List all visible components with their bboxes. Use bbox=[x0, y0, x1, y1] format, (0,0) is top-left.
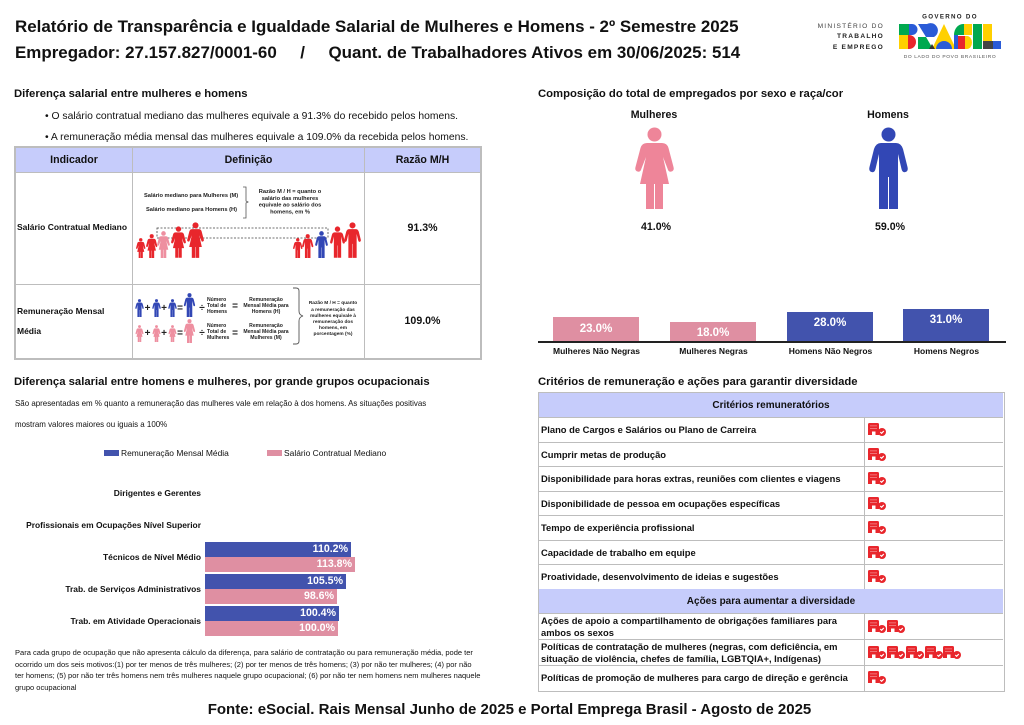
table header: razão: Razão M/H bbox=[396, 154, 449, 166]
bar: mulheres não negras: 23.0% bbox=[580, 323, 612, 335]
label: homens: Homens bbox=[867, 109, 909, 121]
label: mulheres: Mulheres bbox=[631, 109, 677, 121]
bar: serviços salário bbox=[205, 589, 337, 604]
row: Políticas de promoção de mulheres para cargo de direção e gerência bbox=[541, 672, 848, 683]
diagram: remuneração média: Número bbox=[207, 323, 226, 329]
diagram: remuneração média: homens, em bbox=[319, 325, 347, 331]
value: 59.0%: 59.0% bbox=[875, 221, 905, 233]
diagram: remuneração média: Mulheres (M) bbox=[250, 335, 282, 341]
category: profissionais: Profissionais em Ocupações Nível Superior bbox=[26, 520, 201, 530]
table header: definição: Definição bbox=[225, 154, 272, 166]
fonte: Fonte: eSocial. Rais Mensal Junho de 2025 e Portal Emprega Brasil - Agosto de 2025 bbox=[208, 700, 811, 718]
bar: técnicos remuneração: 110.2% bbox=[313, 543, 348, 555]
diagram: remuneração média: Número bbox=[207, 297, 226, 303]
bar: homens não negros: 28.0% bbox=[814, 317, 846, 329]
bar: técnicos salário bbox=[205, 557, 355, 572]
bar: serviços remuneração: 105.5% bbox=[307, 575, 343, 587]
diagram: salário mediano: Salário mediano para Homens (H) bbox=[146, 207, 237, 213]
diagram: remuneração média: + bbox=[145, 328, 151, 339]
row label: remuneração mensal média: Média bbox=[17, 326, 41, 336]
logo: Governo do Brasil: GOVERNO DO bbox=[922, 14, 978, 20]
bar chart: grupos ocupacionais bbox=[26, 488, 355, 636]
row: Políticas de contratação de mulheres (negras, com deficiência, em bbox=[541, 641, 837, 652]
diagram: remuneração média bbox=[135, 288, 357, 344]
diagram: remuneração média: = bbox=[232, 301, 238, 312]
diagram: remuneração média: + bbox=[161, 328, 167, 339]
diagram: remuneração média: Remuneração bbox=[249, 323, 283, 329]
category: mulheres negras: Mulheres Negras bbox=[679, 346, 748, 356]
heading: composição: Composição do total de empregados por sexo e raça/cor bbox=[538, 88, 843, 100]
logo: Ministério do Trabalho e Emprego: E EMPREGO bbox=[833, 44, 884, 51]
category: serviços: Trab. de Serviços Administrativos bbox=[65, 584, 201, 594]
row: Disponibilidade de pessoa em ocupações específicas bbox=[541, 498, 780, 509]
bar: operacionais remuneração bbox=[205, 606, 339, 621]
diagram: salário mediano: salário das mulheres bbox=[262, 196, 318, 202]
value: 41.0%: 41.0% bbox=[641, 221, 671, 233]
row bbox=[539, 443, 1003, 467]
category: homens não negros: Homens Não Negros bbox=[789, 346, 872, 356]
value: 109.0%: 109.0% bbox=[405, 315, 440, 327]
legend: salário bbox=[267, 450, 282, 456]
diagram: remuneração média: Mensal Média para bbox=[243, 303, 289, 309]
row bbox=[539, 640, 1003, 666]
row bbox=[539, 516, 1003, 541]
bar: operacionais salário bbox=[205, 621, 338, 636]
legend: Remuneração Mensal Média bbox=[121, 448, 229, 458]
diagram: remuneração média: + bbox=[161, 303, 167, 314]
panel: tabela de critérios bbox=[538, 392, 1005, 692]
row label: salário contratual mediano: Salário Contratual Mediano bbox=[17, 222, 127, 232]
text block: explicação: São apresentadas em % quanto a remuneração das mulheres vale em relação à dos homens. As situações positivas mostram valores maiores ou iguais a 100% bbox=[15, 399, 426, 429]
diagram: remuneração média: Homens (H) bbox=[252, 309, 281, 315]
bar: mulheres negras bbox=[670, 322, 756, 342]
bar: homens negros bbox=[903, 309, 989, 342]
row bbox=[539, 467, 1003, 492]
logo: Ministério do Trabalho e Emprego: TRABALHO bbox=[837, 33, 884, 40]
diagram: salário mediano: Razão M / H = quanto o bbox=[259, 189, 322, 195]
value: 91.3%: 91.3% bbox=[407, 222, 438, 234]
bar: homens não negros bbox=[787, 312, 873, 342]
category: técnicos: Técnicos de Nível Médio bbox=[103, 552, 201, 562]
bar: mulheres negras: 18.0% bbox=[697, 327, 729, 339]
diagram: remuneração média: mulheres equivale à bbox=[310, 313, 356, 319]
heading: grupos ocupacionais: Diferença salarial entre homens e mulheres, por grande grupos ocupacionais bbox=[14, 376, 430, 388]
logo: Governo do Brasil bbox=[899, 14, 1001, 60]
diagram: remuneração média: Razão M / H = quanto bbox=[309, 300, 357, 306]
bar: serviços remuneração bbox=[205, 574, 346, 589]
diagram: salário mediano: Salário mediano para Mulheres (M) bbox=[144, 193, 238, 199]
header row bbox=[16, 148, 480, 172]
header: critérios remuneratórios: Critérios remuneratórios bbox=[712, 400, 830, 411]
row: Ações de apoio a compartilhamento de obrigações familiares para bbox=[541, 615, 837, 626]
category: mulheres não negras: Mulheres Não Negras bbox=[553, 346, 640, 356]
diagram: remuneração média: + bbox=[145, 303, 151, 314]
row: Tempo de experiência profissional bbox=[541, 522, 695, 533]
legend: Salário Contratual Mediano bbox=[284, 448, 386, 458]
axis bbox=[538, 341, 1006, 343]
diagram: remuneração média: a remuneração das bbox=[311, 307, 355, 313]
table header: indicador: Indicador bbox=[50, 154, 98, 166]
legend bbox=[104, 448, 386, 458]
title: Relatório de Transparência e Igualdade Salarial de Mulheres e Homens - 2º Semestre 2025 Empregador: 27.157.827/0001-60 / Quant. de Trabalhadores Ativos em 30/06/2025: 514 bbox=[15, 17, 740, 62]
bar: mulheres não negras bbox=[553, 317, 639, 342]
diagram: remuneração média: Homens bbox=[207, 309, 227, 315]
header: ações bbox=[539, 589, 1003, 614]
panel: tabela de indicadores bbox=[14, 146, 482, 360]
text block: nota: Para cada grupo de ocupação que não apresenta cálculo da diferença, para salário de contratação ou para remuneração média, pode ter ocorrido um dos seis motivos:(1) por ter menos de três mulheres; (2) por ter menos de três homens; (3) por não ter mulheres; (4) por não ter homens; (5) por não ter três homens nem três mulheres naquele grupo ocupacional; (6) por não ter nem homens nem mulheres naquele grupo ocupacional bbox=[15, 648, 480, 692]
row: situação de violência, chefes de família, LGBTQIA+, Indígenas) bbox=[541, 652, 821, 664]
logo: Ministério do Trabalho e Emprego bbox=[818, 22, 884, 51]
category: dirigentes: Dirigentes e Gerentes bbox=[114, 488, 201, 498]
diagram: remuneração média: Total de bbox=[207, 329, 226, 335]
icon: homem bbox=[869, 128, 908, 209]
row: Disponibilidade para horas extras, reuniões com clientes e viagens bbox=[541, 473, 841, 484]
header: critérios remuneratórios bbox=[539, 393, 1003, 418]
logo: Ministério do Trabalho e Emprego: MINISTÉRIO DO bbox=[818, 23, 884, 30]
legend: remuneração bbox=[104, 450, 119, 456]
bar: operacionais salário: 100.0% bbox=[299, 622, 335, 634]
bar: homens negros: 31.0% bbox=[930, 314, 962, 326]
text block: resumo: • O salário contratual mediano das mulheres equivale a 91.3% do recebido pelos homens. • A remuneração média mensal das mulheres equivale a 109.0% da recebida pelos homens. bbox=[45, 111, 468, 142]
row: Capacidade de trabalho em equipe bbox=[541, 547, 696, 558]
row: Cumprir metas de produção bbox=[541, 449, 666, 460]
diagram: remuneração média: Total de bbox=[207, 303, 226, 309]
diagram: remuneração média: Mulheres bbox=[207, 335, 230, 341]
bar: técnicos remuneração bbox=[205, 542, 351, 557]
row: Plano de Cargos e Salários ou Plano de Carreira bbox=[541, 424, 756, 435]
diagram: remuneração média: = bbox=[177, 303, 183, 314]
icons: critérios atendidos bbox=[868, 423, 961, 684]
row: ambos os sexos bbox=[541, 626, 614, 638]
icon: mulher bbox=[635, 128, 674, 209]
diagram: remuneração média: = bbox=[232, 328, 238, 339]
bar: técnicos salário: 113.8% bbox=[317, 558, 352, 570]
row bbox=[539, 614, 1003, 640]
row: Proatividade, desenvolvimento de ideias e sugestões bbox=[541, 571, 779, 582]
diagram: remuneração média: porcentagem (%) bbox=[314, 331, 353, 337]
heading: diferença salarial: Diferença salarial entre mulheres e homens bbox=[14, 88, 248, 100]
bar: operacionais remuneração: 100.4% bbox=[300, 607, 336, 619]
row label: remuneração mensal média: Remuneração Mensal bbox=[17, 306, 104, 316]
row bbox=[539, 492, 1003, 516]
diagram: salário mediano: homens, em % bbox=[270, 210, 310, 216]
diagram: salário mediano: equivale ao salário dos bbox=[259, 202, 321, 208]
row bbox=[539, 418, 1003, 443]
row bbox=[539, 541, 1003, 565]
diagram: remuneração média: ÷ bbox=[199, 303, 205, 314]
diagram: remuneração média: Remuneração bbox=[249, 297, 283, 303]
diagram: remuneração média: remuneração dos bbox=[313, 319, 353, 325]
header: ações: Ações para aumentar a diversidade bbox=[687, 596, 855, 607]
logo: Governo do Brasil: DO LADO DO POVO BRASILEIRO bbox=[904, 54, 996, 60]
diagram: remuneração média: ÷ bbox=[199, 328, 205, 339]
row label: remuneração mensal média bbox=[17, 306, 104, 336]
category: operacionais: Trab. em Atividade Operacionais bbox=[70, 616, 201, 626]
category: homens negros: Homens Negros bbox=[914, 346, 979, 356]
heading: critérios: Critérios de remuneração e ações para garantir diversidade bbox=[538, 376, 858, 388]
diagram: salário mediano bbox=[136, 186, 361, 258]
bar: serviços salário: 98.6% bbox=[304, 590, 334, 602]
diagram: remuneração média: = bbox=[177, 328, 183, 339]
bar chart: raça/cor bbox=[538, 309, 1006, 356]
diagram: remuneração média: Mensal Média para bbox=[243, 329, 289, 335]
